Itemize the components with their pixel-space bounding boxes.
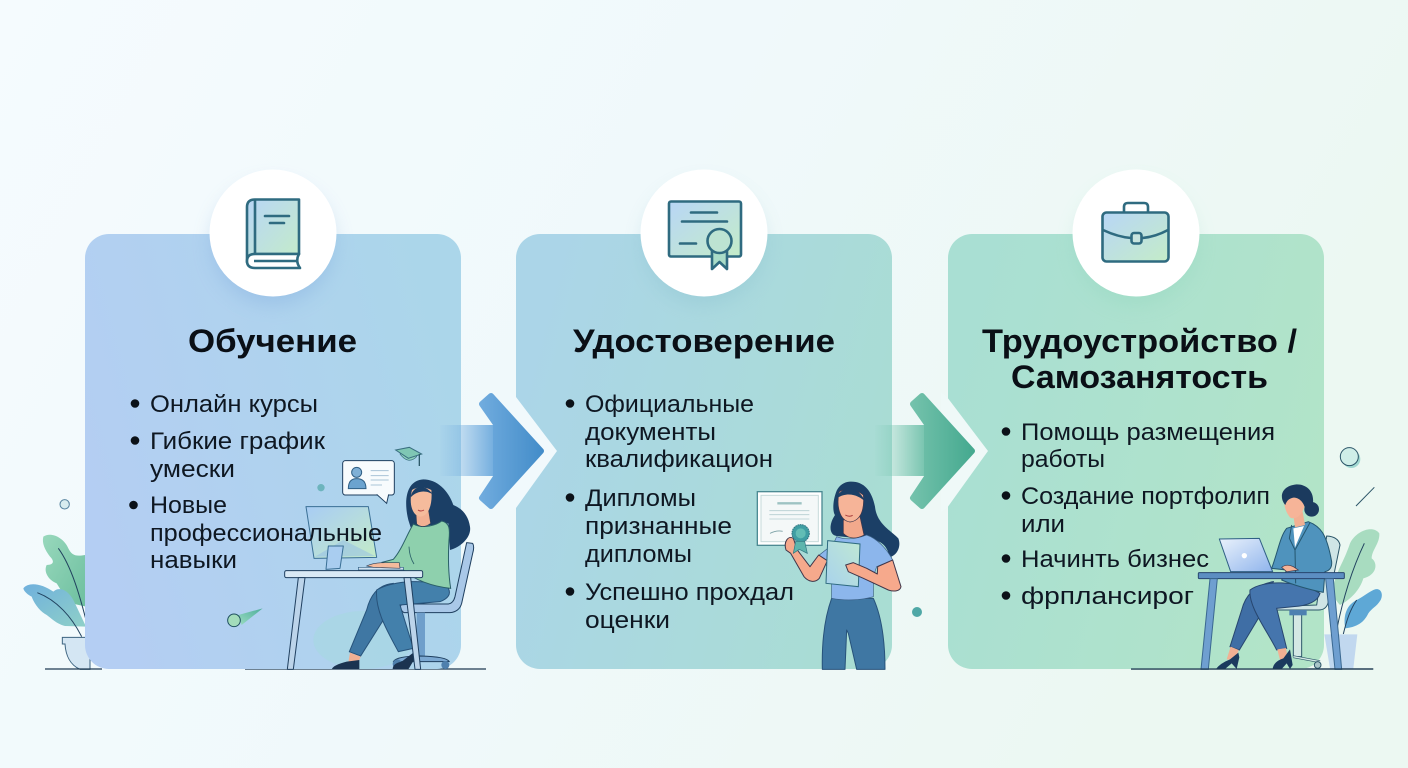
arrow: Удостоверение to Трудоустройство (875, 392, 988, 512)
ground line left (45, 668, 486, 670)
bullet list: Помощь размещения (1021, 419, 1275, 446)
bullet list: работы (1021, 446, 1105, 473)
right plant decoration (1324, 448, 1382, 668)
icon circle (210, 170, 336, 304)
heading: Удостоверение (573, 323, 835, 359)
bullet list: Онлайн курсы (150, 391, 318, 418)
icon: briefcase (1102, 203, 1168, 262)
bullet list: Гибкие график (150, 428, 326, 455)
illustration: woman with certificate (757, 482, 901, 669)
bullet list (129, 391, 382, 574)
bullet list: или (1021, 511, 1065, 538)
bullet list: Официальные (585, 391, 754, 418)
desk (1198, 573, 1344, 579)
bullet list: квалификацион (585, 446, 773, 473)
bullet list: документы (585, 419, 716, 446)
panel: Обучение (85, 170, 474, 669)
bullet list: Успешно прохдал (585, 579, 794, 606)
heading: Обучение (188, 323, 357, 359)
bullet list: Дипломы (585, 485, 696, 512)
ground line right (1131, 668, 1373, 670)
bullet list: Создание портфолип (1021, 483, 1270, 510)
left plant decoration (23, 500, 90, 669)
monitor (306, 507, 377, 558)
bullet list: Новые (150, 492, 227, 519)
arrow: Обучение to Удостоверение (440, 392, 557, 512)
bullet list: умески (150, 456, 235, 483)
heading: Трудоустройство / (982, 323, 1297, 359)
decorative dot (912, 607, 922, 617)
panel: Удостоверение (516, 170, 901, 669)
laptop (1219, 538, 1273, 572)
chair (400, 543, 474, 613)
bullet list: оценки (585, 607, 670, 634)
bullet list: дипломы (585, 541, 692, 568)
icon circle (640, 170, 768, 304)
illustration: woman at desk (228, 447, 474, 669)
icon: certificate (669, 202, 741, 269)
bullet list: профессиональные (150, 520, 382, 547)
bullet list: навыки (150, 547, 237, 574)
illustration: woman at laptop (1131, 484, 1373, 669)
heading (982, 323, 1297, 395)
bullet list: фрплансирог (1021, 583, 1194, 610)
bullet list (566, 391, 794, 634)
bullet list: признанные (585, 513, 732, 540)
icon: book (247, 200, 300, 268)
desk (285, 571, 423, 578)
panel: Трудоустройство / Самозанятость (948, 170, 1373, 669)
bullet list (1002, 419, 1275, 610)
heading: Самозанятость (1011, 359, 1268, 395)
icon circle (1072, 170, 1200, 304)
bullet list: Начинть бизнес (1021, 546, 1209, 573)
